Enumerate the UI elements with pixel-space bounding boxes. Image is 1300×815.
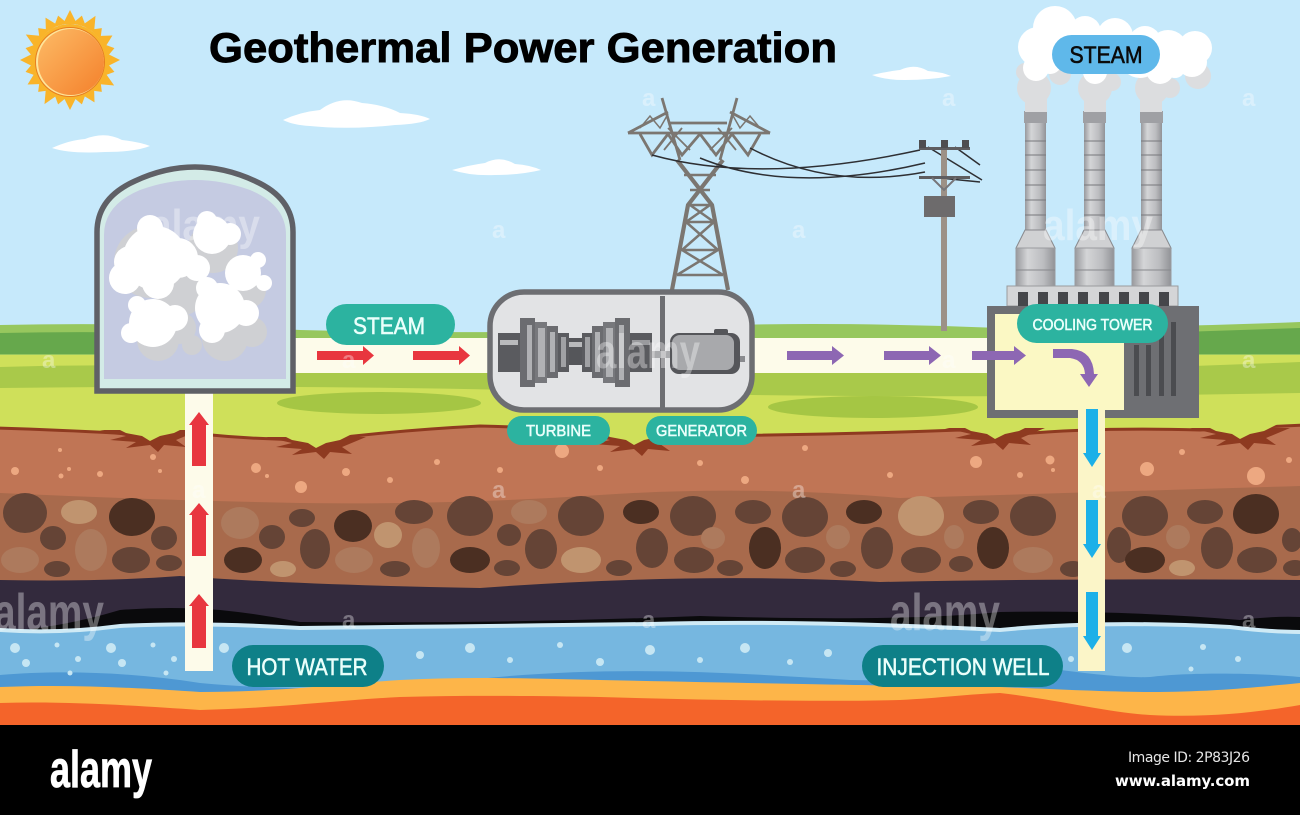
alamy logo: alamy: [50, 741, 152, 799]
turbine label: [507, 416, 610, 445]
stock watermarks: a: [1242, 607, 1256, 634]
image id: Image ID: 2P83J26: [1128, 750, 1250, 766]
cooling tower building: [987, 286, 1199, 418]
topsoil layer: [0, 425, 1300, 510]
cooling tower label: COOLING TOWER: [1032, 317, 1152, 334]
stock watermarks: a: [1242, 85, 1256, 112]
soil pebbles: [11, 444, 1292, 493]
stock watermarks: alamy: [596, 326, 700, 379]
turbine: [498, 318, 652, 387]
steam storage tank: [97, 167, 293, 391]
chimney steam cloud: [1016, 6, 1212, 112]
stock watermarks: [0, 85, 1256, 642]
dark bedrock layer: [0, 576, 1300, 640]
groundwater layer: [0, 621, 1300, 700]
generator label: [646, 416, 757, 445]
turbine label: TURBINE: [526, 423, 591, 440]
title: Geothermal Power Generation: [209, 24, 837, 71]
grass root tufts: [100, 424, 1290, 459]
stock watermarks: a: [492, 217, 506, 244]
stock watermarks: a: [642, 85, 656, 112]
purple flow arrows: [787, 346, 1098, 387]
injection well pipe: [1078, 405, 1105, 671]
stock watermarks: a: [1092, 477, 1106, 504]
blue downward arrows: [1083, 409, 1101, 650]
utility pole: [919, 140, 970, 331]
sun: [20, 10, 120, 110]
steam label (pipe): [326, 304, 455, 345]
stock watermarks: a: [792, 477, 806, 504]
footer bar: [0, 725, 1300, 815]
sky background: [0, 0, 1300, 340]
red upward arrows: [189, 412, 209, 648]
power lines: [652, 147, 982, 182]
hot water production well: [185, 390, 213, 671]
smoke stacks: [1016, 111, 1171, 286]
stock watermarks: a: [1242, 347, 1256, 374]
injection well label: [862, 645, 1063, 687]
injection well label: INJECTION WELL: [876, 654, 1050, 681]
stock watermarks: a: [342, 347, 356, 374]
steam label (top): STEAM: [1070, 42, 1142, 69]
hot water label: [232, 645, 384, 687]
cooling tower label: [1017, 304, 1168, 343]
turbine and generator housing: [490, 292, 752, 410]
magma layers: [0, 678, 1300, 730]
horizontal steam pipe: [290, 338, 1000, 373]
black impermeable layer: [0, 608, 1300, 645]
stock watermarks: a: [792, 217, 806, 244]
stock watermarks: a: [942, 347, 956, 374]
red steam arrows: [317, 346, 470, 365]
stock watermarks: alamy: [890, 584, 1000, 642]
water bubbles: [10, 642, 1241, 676]
stock watermarks: a: [192, 477, 206, 504]
hot water label: HOT WATER: [246, 654, 368, 681]
stock watermarks: a: [942, 85, 956, 112]
stock watermarks: a: [42, 347, 56, 374]
rock layer: [0, 486, 1300, 590]
background fields: [0, 322, 1300, 445]
generator: [652, 329, 745, 374]
steam cloud in tank: [109, 211, 272, 361]
steam label (top): [1052, 35, 1160, 74]
stock watermarks: alamy: [150, 201, 260, 250]
steam label (pipe): STEAM: [353, 313, 425, 340]
clouds in sky: [52, 67, 951, 175]
website: www.alamy.com: [1115, 772, 1250, 790]
stock watermarks: a: [342, 607, 356, 634]
stock watermarks: a: [492, 477, 506, 504]
generator label: GENERATOR: [656, 423, 747, 440]
embedded stones: [1, 493, 1300, 577]
stock watermarks: alamy: [1043, 201, 1153, 250]
stock watermarks: a: [642, 607, 656, 634]
transmission tower: [628, 98, 770, 290]
